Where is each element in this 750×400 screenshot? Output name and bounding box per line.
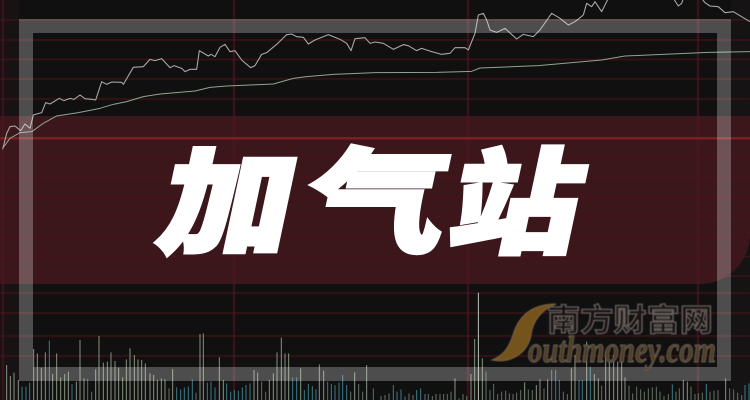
price line [3,0,750,149]
teal volume bars [22,341,749,400]
line chart: price and average [3,0,750,149]
icon: gold swoosh S [492,304,556,361]
dim volume bars [92,372,742,400]
title character 1: 加 [149,141,308,269]
panel: red title band [0,116,750,284]
band highlight line [0,137,750,140]
title [149,141,596,269]
watermark logo [492,303,716,371]
title character 3: 站 [439,141,596,269]
watermark Chinese name: 南方财富网 [547,303,713,338]
average line [3,52,750,148]
title character 2: 气 [294,141,462,268]
volume bars [7,293,749,400]
pale volume bars [7,333,726,400]
tallest volume spike [477,293,480,400]
